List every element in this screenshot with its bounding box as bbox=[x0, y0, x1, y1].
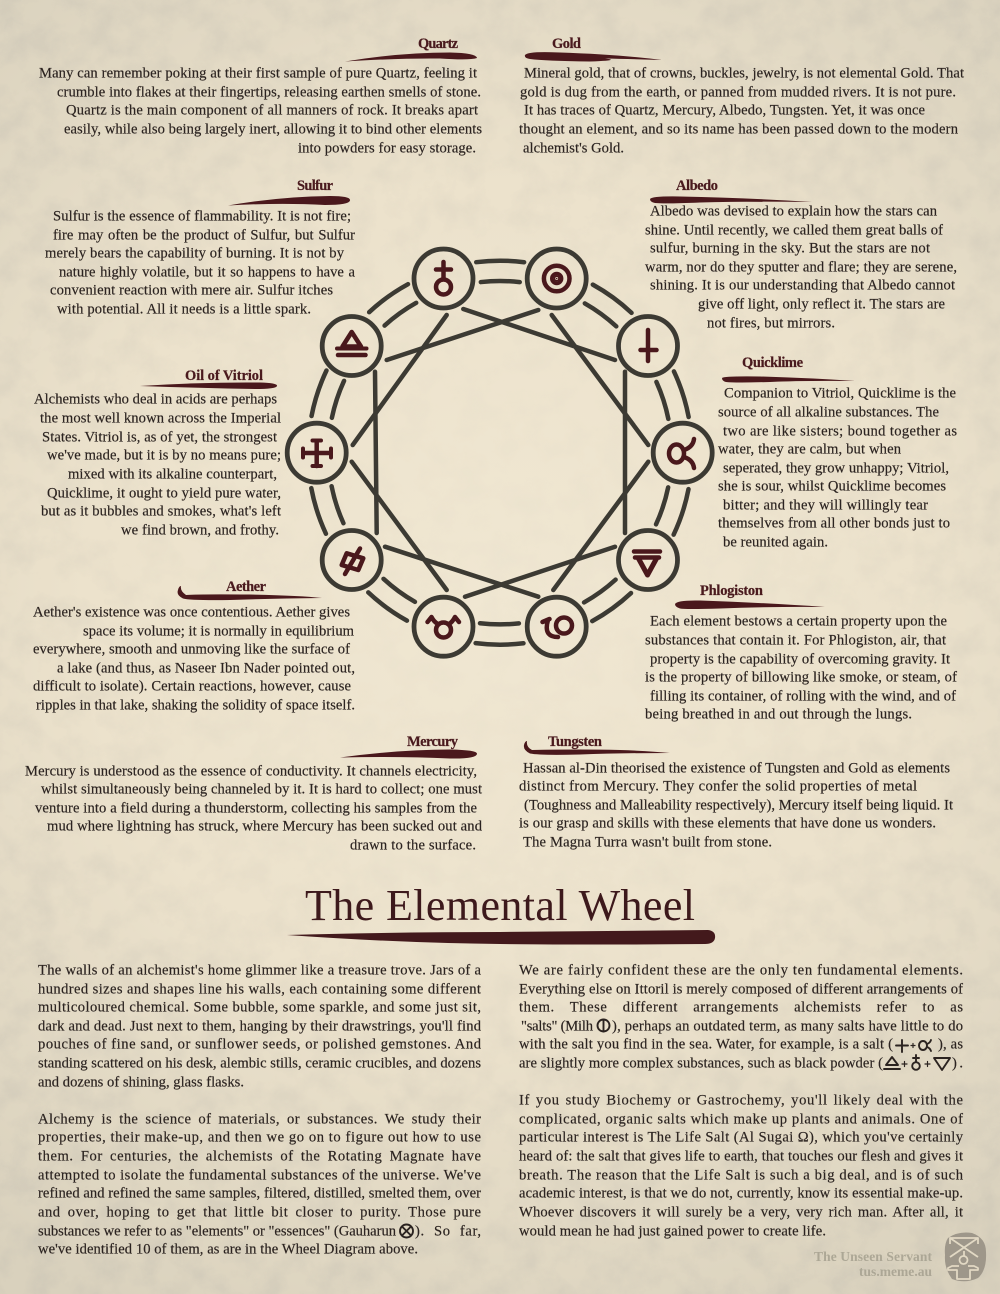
text block: Sulfur: fire may often be the product of Sulfur, but Sulfur bbox=[53, 228, 355, 244]
heading: Quartz bbox=[345, 36, 477, 62]
text block: Quicklime: she is sour, whilst Quicklime becomes bbox=[718, 478, 946, 494]
text block: Albedo: not fires, but mirrors. bbox=[707, 316, 835, 332]
text block: Phlogiston bbox=[645, 614, 957, 722]
text block: Phlogiston: filling its container, of rolling with the wind, and of bbox=[650, 688, 956, 704]
text block: Aether: space its volume; it is normally in equilibrium bbox=[83, 624, 355, 640]
text block: Sulfur: convenient reaction with mere air. Sulfur itches bbox=[50, 282, 333, 298]
heading: Oil of Vitriol: Oil of Vitriol bbox=[185, 368, 263, 384]
text block: Quartz: Many can remember poking at their first sample of pure Quartz, feeling it bbox=[39, 66, 477, 82]
text block: Mercury: Mercury is understood as the essence of conductivity. It channels electricity, bbox=[25, 764, 477, 780]
text block: Oil of Vitriol: Quicklime, it ought to yield pure water, bbox=[47, 486, 281, 502]
text block: Oil of Vitriol: we've made, but it is by no means pure; bbox=[47, 448, 281, 464]
heading: Gold bbox=[525, 36, 662, 62]
body text: left column, paragraph 2: properties, their make-up, and then we go on to figure out how to use bbox=[38, 1130, 481, 1146]
text block: Mercury: mud where lightning has struck, where Mercury has been sucked out and bbox=[47, 818, 483, 834]
body text: left column, paragraph 2: them. For centuries, the alchemists of the Rotating Magnate have bbox=[38, 1148, 481, 1164]
body text: left column, paragraph 1: hundred sizes and shapes line his walls, each containing some different bbox=[38, 982, 481, 998]
heading: Mercury: Mercury bbox=[407, 734, 459, 750]
text block: Gold: Mineral gold, that of crowns, buckles, jewelry, is not elemental Gold. That bbox=[524, 66, 964, 82]
body text: right column, paragraph 2: If you study Biochemy or Gastrochemy, you'll likely deal with the bbox=[519, 1092, 963, 1108]
text block: Mercury bbox=[25, 764, 483, 854]
body text: left column, paragraph 2: we've identified 10 of them, as are in the Wheel Diagram above. bbox=[38, 1242, 418, 1258]
text block: Phlogiston: property is the capability of overcoming gravity. It bbox=[650, 652, 950, 668]
body text: left column, paragraph 1: multicoloured chemical. Some bubble, some sparkle, and some just sit, bbox=[38, 1000, 481, 1016]
text block: Albedo: give off light, only reflect it. The stars are bbox=[698, 296, 945, 312]
text block: Aether bbox=[33, 604, 355, 714]
title: The Elemental Wheel bbox=[305, 881, 695, 930]
body text: right column, paragraph 2: complicated, organic salts which make up plants and animals. One of bbox=[519, 1112, 963, 1128]
text block: Gold: gold is dug from the earth, or panned from mudded rivers. It is not pure. bbox=[520, 84, 956, 100]
text block: Gold: thought an element, and so its name has been passed down to the modern bbox=[519, 122, 959, 138]
text block: Quicklime bbox=[718, 386, 957, 550]
text block: Sulfur: with potential. All it needs is a little spark. bbox=[57, 302, 311, 318]
text block: Mercury: whilst simultaneously being channeled by it. It is hard to collect; one must bbox=[41, 782, 482, 798]
text block: Tungsten bbox=[519, 760, 953, 850]
icon: vitriol plus quicklime formula bbox=[896, 1040, 931, 1052]
text block: Oil of Vitriol bbox=[34, 392, 281, 538]
text block: Quartz: Quartz is the main component of all manners of rock. It breaks apart bbox=[66, 102, 478, 118]
text block: Albedo bbox=[645, 204, 957, 332]
heading: Quicklime bbox=[722, 355, 855, 382]
heading: Phlogiston bbox=[675, 583, 825, 609]
body text: left column, paragraph 2: and over, hoping to get that little bit closer to purity. Those pure bbox=[38, 1204, 481, 1220]
text block: Sulfur bbox=[45, 208, 356, 318]
title brush stroke bbox=[287, 930, 715, 944]
text block: Quicklime: themselves from all other bonds just to bbox=[718, 516, 950, 532]
heading: Mercury bbox=[340, 734, 477, 759]
text block: Quartz: into powders for easy storage. bbox=[298, 140, 476, 156]
text block: Sulfur: merely bears the capability of burning. It is not by bbox=[45, 246, 345, 262]
heading: Sulfur: Sulfur bbox=[297, 178, 334, 194]
body text: right column, paragraph 1: We are fairly confident these are the only ten fundamental elements. bbox=[519, 962, 963, 978]
body text: right column, paragraph 1: ), perhaps an outdated term, as many salts have little to do bbox=[612, 1018, 963, 1034]
body text: right column, paragraph 2: heard of: the salt that gives life to earth, that touches our flesh and gives it bbox=[519, 1148, 963, 1164]
text block: Tungsten: (Toughness and Malleability respectively), Mercury itself being liquid. It bbox=[524, 798, 953, 814]
heading: Albedo: Albedo bbox=[676, 178, 718, 194]
text block: Aether: a lake (and thus, as Naseer Ibn Nader pointed out, bbox=[57, 660, 355, 676]
heading: Sulfur bbox=[228, 178, 350, 206]
heading: Phlogiston: Phlogiston bbox=[700, 583, 763, 599]
text block: Quicklime: source of all alkaline substances. The bbox=[718, 404, 939, 420]
body text: right column, paragraph 1: are slightly more complex substances, such as black powder ( bbox=[519, 1056, 883, 1072]
outer ring arcs bbox=[286, 238, 714, 667]
text block: Oil of Vitriol: the most well known across the Imperial bbox=[40, 410, 281, 426]
body text: right column, paragraph 1: ), as bbox=[938, 1036, 963, 1052]
text block: Albedo: sulfur, burning in the sky. But the stars are not bbox=[650, 240, 930, 256]
body text: right column, paragraph 2: particular interest is The Life Salt (Al Sugai Ω), which you've certainly bbox=[519, 1130, 964, 1146]
text block: Sulfur: Sulfur is the essence of flammability. It is not fire; bbox=[53, 208, 351, 224]
body text: right column, paragraph 2: breath. The reason that the Life Salt is such a big deal, and is of such bbox=[519, 1168, 964, 1184]
heading: Tungsten: Tungsten bbox=[548, 734, 602, 750]
icon: gold cross bbox=[640, 330, 656, 361]
heading: Aether bbox=[178, 579, 322, 600]
text block: Tungsten: is our grasp and skills with these elements that have done us wonders. bbox=[519, 816, 936, 832]
body text: right column, paragraph 2: academic interest, is that we do not, currently, know its essential make-up. bbox=[519, 1186, 963, 1202]
body text: right column, paragraph 2: Whoever discovers it will surely be a very, very rich man. After all, it bbox=[519, 1204, 963, 1220]
text block: Quicklime: Companion to Vitriol, Quicklime is the bbox=[724, 386, 956, 402]
icon: tungsten bbox=[542, 618, 572, 637]
heading: Oil of Vitriol bbox=[140, 368, 277, 389]
text block: Phlogiston: substances that contain it. For Phlogiston, air, that bbox=[645, 632, 946, 648]
body text: left column, paragraph 2: ). So far, bbox=[415, 1224, 481, 1240]
text block: Quicklime: two are like sisters; bound together as bbox=[723, 424, 957, 440]
text block: Mercury: drawn to the surface. bbox=[350, 838, 476, 854]
heading: Quicklime: Quicklime bbox=[742, 355, 804, 371]
body text: right column, paragraph 1: ). bbox=[952, 1056, 963, 1072]
text block: Aether: difficult to isolate). Certain reactions, however, cause bbox=[33, 678, 351, 694]
body text: left column, paragraph 2: substances we refer to as "elements" or "essences" (Gauharun bbox=[38, 1224, 397, 1240]
text block: Oil of Vitriol: we find brown, and frothy. bbox=[121, 522, 279, 538]
icon: sulfur bbox=[436, 262, 451, 294]
heading: Quartz: Quartz bbox=[418, 36, 459, 52]
icon: mercury bbox=[428, 617, 459, 638]
watermark icon bbox=[945, 1233, 986, 1281]
node rings bbox=[287, 249, 712, 656]
body text: left column, paragraph 1: dark and dead. Just next to them, hanging by their drawstrings, you'll find bbox=[38, 1018, 482, 1034]
text block: Sulfur: nature highly volatile, but it so happens to have a bbox=[59, 264, 356, 280]
text block: Albedo: shine. Until recently, we called them great balls of bbox=[645, 222, 943, 238]
heading: Albedo bbox=[650, 178, 812, 203]
heading: Tungsten bbox=[524, 734, 670, 755]
text block: Phlogiston: is the property of billowing like smoke, or steam, of bbox=[645, 670, 957, 686]
text block: Oil of Vitriol: but as it bubbles and smokes, what's left bbox=[41, 504, 281, 520]
icon: phlogiston bbox=[634, 552, 660, 575]
watermark text: tus.meme.au bbox=[859, 1264, 932, 1279]
text block: Oil of Vitriol: Alchemists who deal in acids are perhaps bbox=[34, 392, 277, 408]
watermark text: The Unseen Servant bbox=[814, 1249, 932, 1264]
text block: Oil of Vitriol: mixed with its alkaline counterpart, bbox=[68, 466, 277, 482]
text block: Gold: It has traces of Quartz, Mercury, Albedo, Tungsten. Yet, it was once bbox=[524, 102, 925, 118]
body text: left column, paragraph 1: pouches of fine sand, or sunflower seeds, or polished gemstones. And bbox=[38, 1036, 482, 1052]
elemental wheel diagram bbox=[286, 238, 714, 667]
text block: Tungsten: The Magna Turra wasn't built from stone. bbox=[523, 834, 772, 850]
inner ring arcs bbox=[310, 263, 690, 642]
text block: Phlogiston: Each element bestows a certain property upon the bbox=[650, 614, 947, 630]
heading: Gold: Gold bbox=[552, 36, 581, 52]
text block: Aether: ripples in that lake, shaking the solidity of space itself. bbox=[36, 698, 355, 714]
watermark text bbox=[814, 1249, 932, 1279]
text block: Quartz bbox=[39, 66, 482, 156]
text block: Aether: Aether's existence was once contentious. Aether gives bbox=[33, 604, 350, 620]
text block: Mercury: venture into a field during a thunderstorm, collecting his samples from the bbox=[35, 800, 477, 816]
body text: left column, paragraph 2: refined and refined the same samples, filtered, distilled, smelted them, over bbox=[38, 1186, 481, 1202]
star chords bbox=[352, 309, 648, 597]
text block: Oil of Vitriol: States. Vitriol is, as of yet, the strongest bbox=[42, 430, 277, 446]
heading: Aether: Aether bbox=[226, 579, 267, 595]
text block: Quartz: crumble into flakes at their fingertips, releasing earthen smells of stone. bbox=[57, 84, 481, 100]
text block: Albedo: warm, nor do they sputter and flare; they are serene, bbox=[645, 260, 957, 276]
text block: Phlogiston: being breathed in and out through the lungs. bbox=[645, 706, 912, 722]
body text: right column, paragraph 1 bbox=[519, 962, 963, 1072]
text block: Tungsten: Hassan al-Din theorised the existence of Tungsten and Gold as elements bbox=[523, 760, 950, 776]
body text: left column, paragraph 1: and dozens of shining, glass flasks. bbox=[38, 1074, 244, 1090]
body text: left column, paragraph 1: standing scattered on his desk, alembic stills, ceramic crucibles, and dozens bbox=[38, 1056, 481, 1072]
text block: Quicklime: bitter; and they will willingly tear bbox=[723, 498, 928, 514]
body text: left column, paragraph 2 bbox=[38, 1112, 481, 1258]
icon: quartz plus sulfur plus phlogiston formula bbox=[884, 1055, 950, 1070]
icon: gauharun symbol bbox=[400, 1224, 413, 1238]
text block: Gold bbox=[519, 66, 964, 156]
icon: quicklime bbox=[669, 439, 694, 468]
text block: Tungsten: distinct from Mercury. They confer the solid properties of metal bbox=[519, 778, 917, 794]
body text: left column, paragraph 2: attempted to isolate the fundamental substances of the universe. We've bbox=[38, 1168, 481, 1184]
body text: right column, paragraph 2 bbox=[519, 1092, 964, 1240]
body text: left column, paragraph 1 bbox=[38, 962, 482, 1090]
body text: right column, paragraph 1: them. These different arrangements alchemists refer to as bbox=[519, 1000, 963, 1016]
icon: aether bbox=[342, 548, 363, 574]
text block: Gold: alchemist's Gold. bbox=[523, 140, 624, 156]
icon: albedo bbox=[544, 266, 570, 291]
icon: vitriol bbox=[303, 440, 331, 466]
body text: right column, paragraph 1: "salts" (Milh bbox=[521, 1018, 594, 1034]
body text: right column, paragraph 1: with the salt you find in the sea. Water, for example, is a salt ( bbox=[519, 1036, 893, 1052]
icon: quartz bbox=[337, 332, 366, 355]
text block: Aether: everywhere, smooth and unmoving like the surface of bbox=[33, 642, 350, 658]
text block: Quicklime: water, they are calm, but when bbox=[718, 442, 902, 458]
icon: milh symbol bbox=[598, 1020, 610, 1032]
body text: right column, paragraph 2: would mean he had just gained power to create life. bbox=[519, 1224, 826, 1240]
body text: left column, paragraph 2: Alchemy is the science of materials, or substances. We study their bbox=[38, 1112, 481, 1128]
text block: Albedo: Albedo was devised to explain how the stars can bbox=[650, 204, 938, 220]
text block: Quicklime: be reunited again. bbox=[723, 534, 828, 550]
text block: Quicklime: seperated, they grow unhappy; Vitriol, bbox=[723, 460, 949, 476]
text block: Quartz: easily, while also being largely inert, allowing it to bind other elements bbox=[64, 122, 482, 138]
text block: Albedo: shining. It is our understanding that Albedo cannot bbox=[650, 278, 955, 294]
body text: right column, paragraph 1: Everything else on Ittoril is merely composed of different arrangements of bbox=[519, 982, 963, 998]
body text: left column, paragraph 1: The walls of an alchemist's home glimmer like a treasure trove. Jars of a bbox=[38, 962, 482, 978]
